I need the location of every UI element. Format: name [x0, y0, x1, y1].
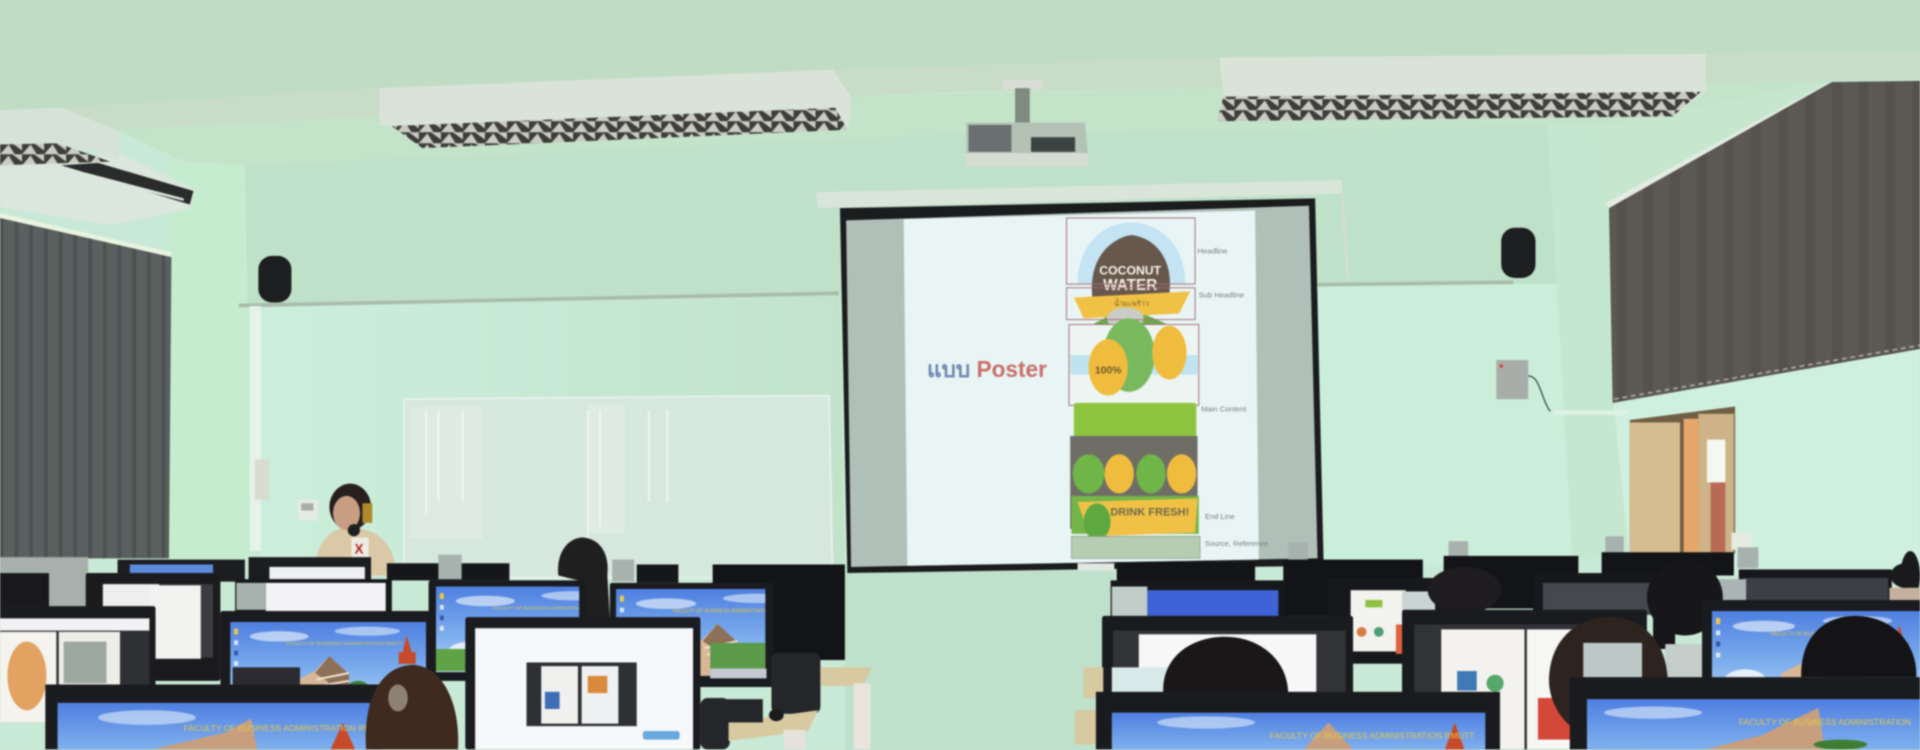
monitor: document	[1102, 616, 1353, 696]
tag	[1738, 547, 1758, 568]
monitor: front centre: FACULTY OF BUSINESS ADMINISTRATION RMUTT	[1270, 730, 1475, 740]
monitor: front right	[1570, 677, 1920, 749]
left back monitors	[0, 555, 845, 660]
student head: distant	[1428, 567, 1501, 613]
screen cord	[1342, 193, 1348, 283]
wall sensor box	[1496, 360, 1550, 411]
monitor: row two left	[86, 573, 220, 681]
ceiling	[0, 0, 1920, 110]
poster: end line	[1071, 496, 1199, 540]
poster: headline: WATER	[1103, 277, 1157, 294]
monitor: row two wallpaper B	[610, 583, 817, 687]
monitor: row three wallpaper	[220, 611, 433, 712]
air conditioner	[0, 153, 196, 225]
slide	[904, 211, 1268, 566]
poster: sub headline: น้ำมะพร้าว	[1114, 298, 1149, 308]
wall trunking: left	[239, 291, 839, 307]
annotation labels: Main Content	[1201, 404, 1247, 413]
chair	[771, 653, 820, 714]
monitor: booklet	[1329, 578, 1445, 664]
speaker: right	[1501, 228, 1536, 278]
poster: end line: DRINK FRESH!	[1110, 507, 1189, 519]
student head: right	[1801, 616, 1916, 677]
monitor: row two wallpaper A	[429, 580, 634, 681]
wall ledge	[1554, 410, 1627, 415]
desk: left front	[729, 710, 818, 749]
student head: ponytail	[366, 665, 458, 749]
tag	[1449, 541, 1468, 558]
thermostat	[298, 500, 318, 520]
monitor: wallpaper right	[1702, 600, 1920, 707]
monitor: row two second	[235, 579, 392, 616]
left column	[164, 162, 253, 563]
ceiling light: left	[0, 108, 119, 165]
monitor: blue screen	[1111, 580, 1286, 620]
tag	[1605, 536, 1624, 553]
student head: front	[1163, 637, 1288, 694]
lower wall	[260, 291, 845, 576]
monitor: row three left	[0, 606, 156, 722]
annotation labels	[1198, 246, 1268, 548]
ceiling light: centre	[380, 70, 851, 148]
annotation labels: End Line	[1205, 512, 1235, 521]
poster: sub headline	[1067, 288, 1195, 343]
poster: headline: COCONUT	[1099, 263, 1162, 277]
monitor: front right: FACULTY OF BUSINESS ADMINISTRATION	[1739, 717, 1911, 727]
presenter: X	[354, 541, 363, 556]
student: masked	[1647, 560, 1723, 686]
conduit	[250, 306, 261, 551]
curtain: left	[0, 213, 171, 558]
monitor: front left: FACULTY OF BUSINESS ADMINISTRATION RMUTT	[184, 723, 389, 733]
annotation labels: Source, Reference	[1205, 539, 1268, 548]
desk: left rear	[820, 667, 872, 749]
poster: main content: 100%	[1095, 365, 1121, 376]
speaker: left	[258, 256, 291, 302]
right upper wall	[1597, 81, 1829, 203]
monitor: front left	[45, 684, 389, 749]
monitor: row three web page	[465, 617, 700, 749]
projection screen	[840, 198, 1324, 573]
presenter	[313, 484, 397, 576]
monitor: code editor	[1533, 573, 1656, 615]
whiteboard	[404, 396, 833, 578]
student: right edge	[1889, 551, 1920, 600]
poster: main content	[1069, 318, 1199, 529]
monitor: front centre	[1096, 692, 1500, 749]
floor wall strip under screen	[845, 571, 1114, 750]
monitor: booklet spread	[1402, 610, 1647, 749]
upper wall	[239, 126, 1558, 304]
poster: source	[1071, 536, 1200, 558]
annotation labels: Sub Headline	[1199, 291, 1244, 300]
slide title: แบบ Poster	[927, 356, 1047, 382]
wall switches	[255, 459, 269, 500]
outlet	[1731, 533, 1752, 550]
curtain: right	[1605, 81, 1920, 403]
keyboard and mouse	[726, 699, 784, 722]
tag: name card	[1288, 542, 1308, 561]
ceiling beam	[61, 51, 1920, 130]
right column	[1548, 126, 1631, 561]
projector	[966, 80, 1089, 167]
right back monitors	[1078, 552, 1734, 616]
ceiling recess	[116, 81, 1829, 203]
student: long hair	[1549, 617, 1668, 729]
lower right wall	[1614, 349, 1920, 576]
desk: centre	[1075, 667, 1103, 744]
wall trunking: right	[1318, 280, 1513, 287]
monitor: dark editor	[1712, 569, 1892, 609]
ceiling light: right	[1217, 54, 1706, 121]
student head: back	[558, 538, 610, 618]
chair	[700, 698, 730, 749]
door	[1630, 407, 1735, 553]
annotation labels: Headline	[1198, 246, 1227, 255]
screen housing	[816, 180, 1342, 208]
poster: headline	[1067, 218, 1195, 306]
lower wall right	[1318, 284, 1572, 566]
